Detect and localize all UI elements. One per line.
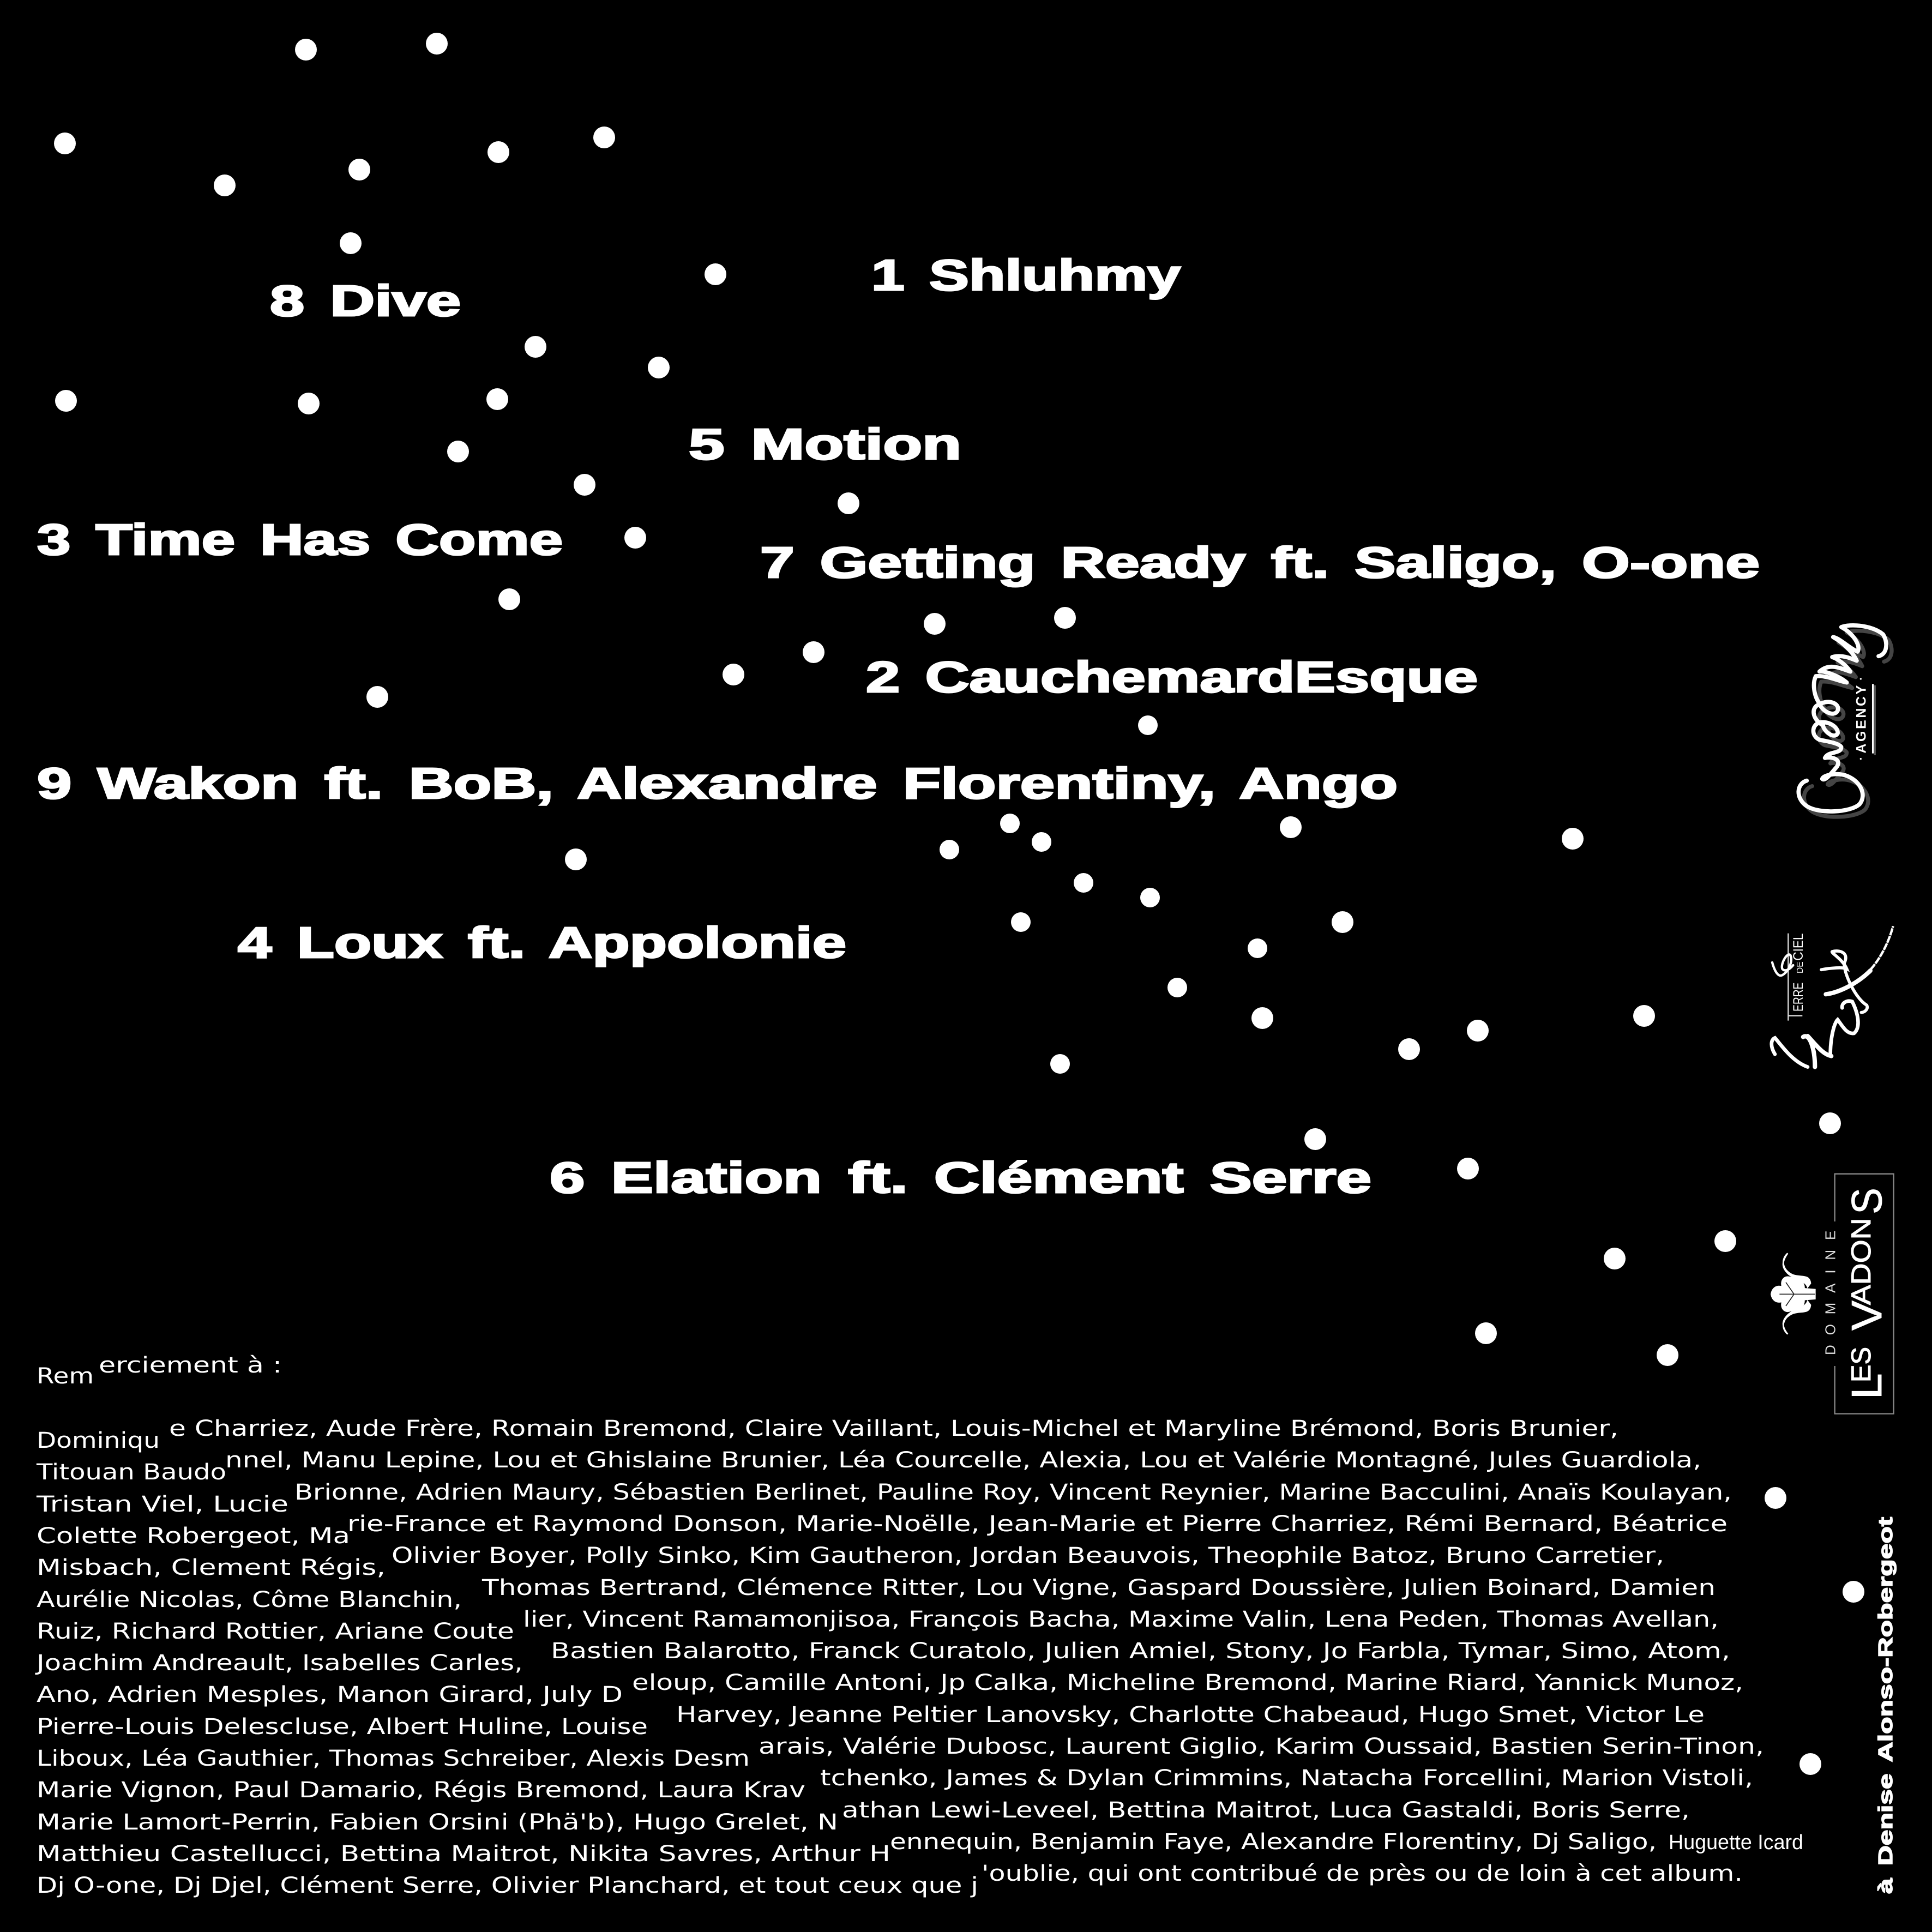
logo: Terre de Ciel: DE — [1796, 961, 1805, 973]
thanks text block: Rem — [37, 1364, 94, 1389]
thanks text block: Liboux, Léa Gauthier, Thomas Schreiber, Alexis Desm — [37, 1746, 750, 1771]
logo: Domaine Les Vadons: DOMAINE — [1822, 1231, 1839, 1355]
thanks text block: eloup, Camille Antoni, Jp Calka, Micheline Bremond, Marine Riard, Yannick Munoz, — [632, 1670, 1743, 1695]
thanks text block: Matthieu Castellucci, Bettina Maitrot, Nikita Savres, Arthur H — [37, 1841, 890, 1867]
thanks text block: Dj O-one, Dj Djel, Clément Serre, Olivier Planchard, et tout ceux que j — [37, 1873, 978, 1898]
track 8 title: 8 Dive — [270, 276, 461, 325]
thanks text block: e Charriez, Aude Frère, Romain Bremond, Claire Vaillant, Louis-Michel et Maryline Brémond, Boris Brunier, — [169, 1416, 1618, 1441]
track 3 title: 3 Time Has Come — [37, 515, 563, 564]
track 5 title: 5 Motion — [689, 420, 961, 468]
thanks text block: Aurélie Nicolas, Côme Blanchin, — [37, 1587, 462, 1612]
track 1 title: 1 Shluhmy — [871, 251, 1181, 299]
track 9 title: 9 Wakon ft. BoB, Alexandre Florentiny, Ango — [37, 759, 1398, 808]
logo: Domaine Les Vadons: V — [1844, 1301, 1891, 1331]
logo: Terre de Ciel: CIEL — [1791, 934, 1806, 961]
thanks text block: athan Lewi-Leveel, Bettina Maitrot, Luca Gastaldi, Boris Serre, — [842, 1798, 1690, 1823]
thanks text block: Dominiqu — [37, 1428, 160, 1453]
thanks text block: Titouan Baudo — [36, 1460, 226, 1485]
thanks text block: Joachim Andreault, Isabelles Carles, — [34, 1651, 523, 1676]
thanks text block: 'oublie, qui ont contribué de près ou de loin à cet album. — [982, 1861, 1743, 1886]
thanks text block — [34, 1353, 1803, 1898]
logo: Terre de Ciel: ERRE — [1791, 983, 1806, 1012]
logo: Domaine Les Vadons: ES — [1846, 1347, 1876, 1382]
track 4 title: 4 Loux ft. Appolonie — [238, 918, 846, 967]
thanks text block: tchenko, James & Dylan Crimmins, Natacha Forcellini, Marion Vistoli, — [820, 1766, 1753, 1791]
logo: Terre de Ciel — [1772, 926, 1893, 1067]
logo: Domaine Les Vadons: S — [1844, 1188, 1891, 1214]
thanks text block: rie-France et Raymond Donson, Marie-Noëlle, Jean-Marie et Pierre Charriez, Rémi Bernard, Béatrice — [347, 1512, 1728, 1537]
thanks text block: Thomas Bertrand, Clémence Ritter, Lou Vigne, Gaspard Doussière, Julien Boinard, Damien — [482, 1575, 1716, 1600]
thanks text block: Marie Vignon, Paul Damario, Régis Bremond, Laura Krav — [37, 1778, 805, 1803]
thanks text block: Brionne, Adrien Maury, Sébastien Berlinet, Pauline Roy, Vincent Reynier, Marine Bacculini, Anaïs Koulayan, — [294, 1480, 1732, 1505]
logo: Domaine Les Vadons: ADON — [1846, 1218, 1876, 1305]
thanks text block: Ruiz, Richard Rottier, Ariane Coute — [37, 1619, 514, 1644]
logo: Domaine Les Vadons — [1771, 1174, 1894, 1414]
thanks text block: Bastien Balarotto, Franck Curatolo, Julien Amiel, Stony, Jo Farbla, Tymar, Simo, Atom, — [551, 1639, 1730, 1664]
track 2 title: 2 CauchemardEsque — [866, 653, 1478, 701]
thanks text block: Marie Lamort-Perrin, Fabien Orsini (Phä'b), Hugo Grelet, N — [37, 1810, 838, 1835]
thanks text block: Huguette Icard — [1669, 1831, 1803, 1854]
logo: Creamy Agency — [1798, 625, 1892, 817]
thanks text block: ennequin, Benjamin Faye, Alexandre Florentiny, Dj Saligo, — [890, 1829, 1657, 1855]
thanks text block: Ano, Adrien Mesples, Manon Girard, July D — [37, 1682, 623, 1707]
thanks text block: Tristan Viel, Lucie — [36, 1492, 288, 1517]
thanks text block: Pierre-Louis Delescluse, Albert Huline, Louise — [37, 1714, 648, 1740]
vertical dedication: à Denise Alonso-Robergeot — [1874, 1517, 1897, 1894]
thanks text block: Harvey, Jeanne Peltier Lanovsky, Charlotte Chabeaud, Hugo Smet, Victor Le — [676, 1702, 1705, 1728]
thanks text block: nnel, Manu Lepine, Lou et Ghislaine Brunier, Léa Courcelle, Alexia, Lou et Valérie Montagné, Jules Guardiola, — [225, 1448, 1701, 1473]
thanks text block: Colette Robergeot, Ma — [37, 1524, 350, 1549]
thanks text block: Olivier Boyer, Polly Sinko, Kim Gautheron, Jordan Beauvois, Theophile Batoz, Bruno Carretier, — [392, 1543, 1664, 1568]
thanks text block: erciement à : — [99, 1353, 282, 1378]
thanks text block: lier, Vincent Ramamonjisoa, François Bacha, Maxime Valin, Lena Peden, Thomas Avellan, — [523, 1607, 1719, 1632]
thanks text block: Misbach, Clement Régis, — [37, 1555, 386, 1580]
logo: Creamy Agency: AGENCY — [1854, 685, 1869, 754]
track 6 title: 6 Elation ft. Clément Serre — [550, 1153, 1371, 1202]
thanks text block: arais, Valérie Dubosc, Laurent Giglio, Karim Oussaid, Bastien Serin-Tinon, — [759, 1734, 1764, 1759]
logo: Domaine Les Vadons: L — [1844, 1373, 1891, 1400]
track 7 title: 7 Getting Ready ft. Saligo, O-one — [760, 538, 1760, 587]
